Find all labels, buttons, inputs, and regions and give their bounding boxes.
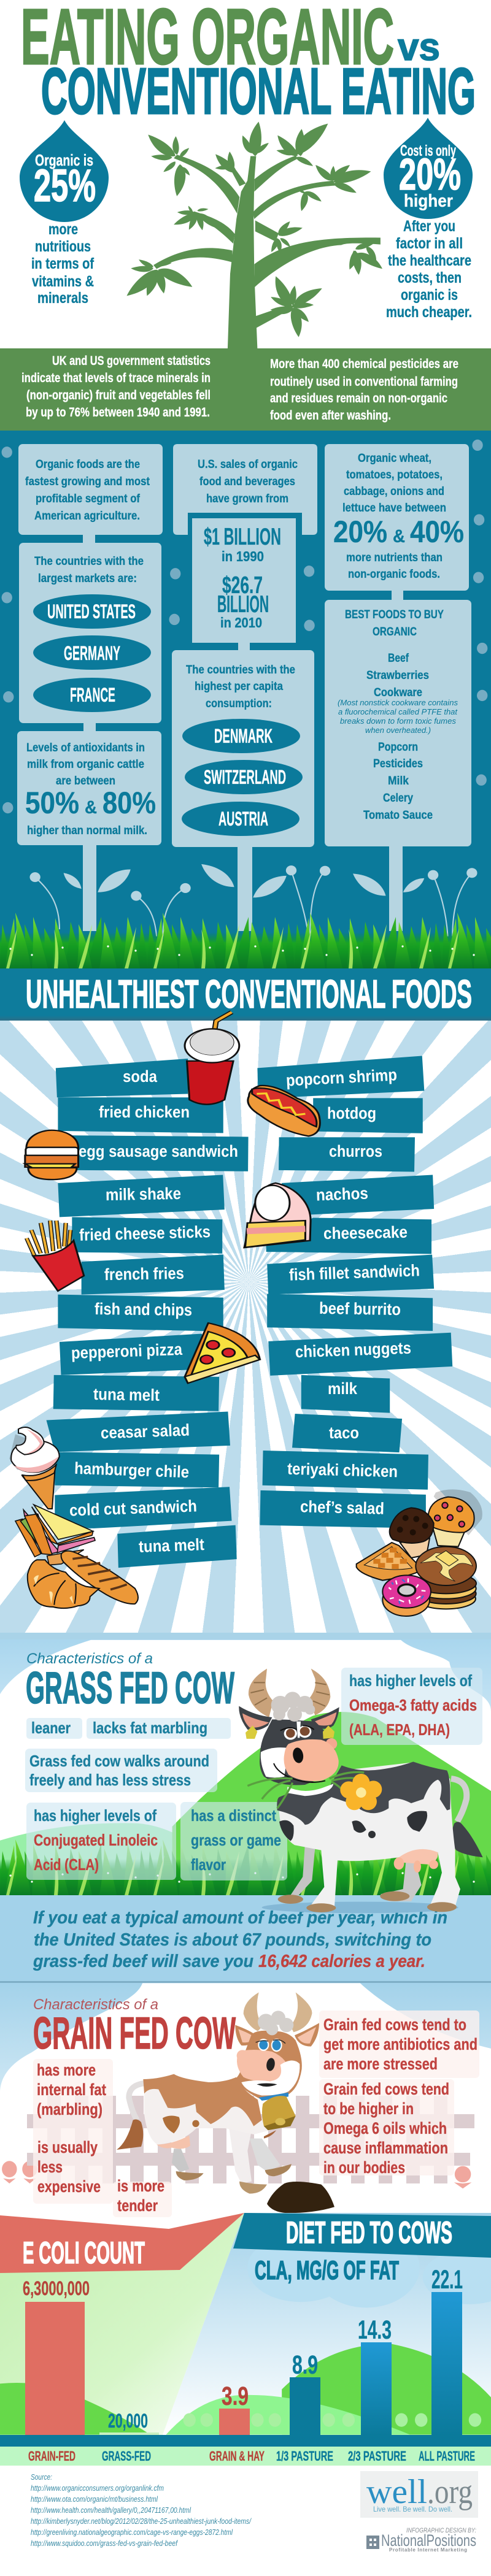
panel: grass fed cow: Conjugated Linoleic <box>34 1831 158 1849</box>
panel: largest markets: The countries with the <box>34 555 144 568</box>
callout: organic is 25% <box>20 120 109 307</box>
panel: US sales <box>173 444 317 643</box>
panel: grass fed cow: has a distinct <box>191 1806 276 1825</box>
panel: US sales: have grown from <box>206 493 288 505</box>
food list text: milk shake <box>106 1184 181 1204</box>
logo: well.org: Live well. Be well. Do well. <box>373 2505 452 2513</box>
panel: grain fed cow: (marbling) <box>37 2100 102 2118</box>
text block: sources: http://kimberlysnyder.net/blog/2012/02/28/the-25-unhealthiest-junk-food-items/ <box>31 2517 252 2526</box>
panel: more nutrients: more nutrients than <box>346 551 443 564</box>
food list text: fried cheese sticks <box>79 1222 211 1244</box>
food list text: churros <box>329 1142 382 1160</box>
panel: grain fed cow: is more <box>117 2177 164 2195</box>
band: calories saved: the United States is about 67 pounds, switching to <box>34 1930 431 1950</box>
text boxes <box>33 2011 479 2217</box>
panel: organic facts background <box>0 431 491 968</box>
icon: croissant <box>28 1560 99 1608</box>
bar chart: CLA by diet: 3.9 <box>222 2382 249 2411</box>
panel: US sales: $26.7 <box>222 572 263 599</box>
food labels: upper boxes <box>56 1056 434 1332</box>
panel: US sales: $1 BILLION <box>204 524 281 550</box>
sign posts <box>83 535 403 931</box>
chart heading: e coli count <box>0 2213 244 2273</box>
callout: cost is only 20% higher: much cheaper. <box>386 304 472 321</box>
panel: more nutrients: & <box>393 526 405 546</box>
panel: more nutrients: tomatoes, potatoes, <box>346 469 443 481</box>
food list text: cold cut sandwich <box>69 1497 197 1520</box>
panel: best foods to buy organic: Cookware <box>374 686 422 699</box>
panel: best foods to buy organic: Milk <box>388 775 409 788</box>
panel: best foods to buy organic: when overheated.) <box>365 726 431 735</box>
panel: highest per capita: DENMARK <box>214 725 273 747</box>
bar chart: e coli count: 6,3000,000 <box>23 2277 90 2299</box>
callout: cost is only 20% higher: higher <box>404 191 453 211</box>
panel: highest per capita: SWITZERLAND <box>204 766 286 788</box>
panel: fastest growing segment: profitable segment of <box>36 493 141 505</box>
chart axis and labels: 2/3 PASTURE <box>348 2448 406 2464</box>
callout: cost is only 20% higher: the healthcare <box>388 252 471 269</box>
panel: more nutrients: cabbage, onions and <box>344 485 444 498</box>
food list text: milk <box>328 1379 358 1398</box>
icon: cake <box>244 1183 311 1248</box>
panel: grain fed cow: less <box>37 2158 63 2176</box>
panel: best foods to buy organic: a fluorochemical called PTFE that <box>338 707 458 716</box>
title: vs <box>398 26 440 69</box>
grass strip <box>0 911 491 968</box>
chart axis and labels: GRASS-FED <box>102 2448 151 2464</box>
food list text: taco <box>329 1424 359 1442</box>
chart axis and labels: 1/3 PASTURE <box>276 2448 333 2464</box>
text block: sources: http://www.organicconsumers.org/organlink.cfm <box>31 2484 164 2493</box>
panel: fastest growing segment: fastest growing and most <box>25 475 150 488</box>
panel: more nutrients: non-organic foods. <box>348 568 440 581</box>
food list text: pepperoni pizza <box>71 1340 183 1362</box>
food list text: hotdog <box>327 1104 376 1122</box>
callout: cost is only 20% higher: costs, then <box>398 269 462 286</box>
text block: sources: Source: <box>31 2473 52 2482</box>
credit: national positions: Profitable Internet Marketing <box>389 2547 467 2553</box>
callout: organic is 25%: Organic is <box>35 151 93 169</box>
food list text: french fries <box>104 1264 184 1284</box>
panel: grain fed cow: Omega 6 oils which <box>323 2119 447 2137</box>
callout: cost is only 20% higher: factor in all <box>396 235 463 252</box>
panel: grass fed cow: freely and has less stress <box>29 1771 191 1789</box>
band: calories saved: grass-fed beef will save you <box>33 1952 253 1971</box>
text block: sources: http://greenliving.nationalgeographic.com/cage-vs-range-eggs-2872.html <box>31 2528 233 2537</box>
panel: grain fed cow <box>0 1983 491 2226</box>
bar chart: CLA by diet: 8.9 <box>292 2350 318 2380</box>
panel: grain fed cow: are more stressed <box>323 2055 438 2073</box>
food labels: lower boxes <box>47 1333 452 1568</box>
panel: best foods to buy organic: BEST FOODS TO BUY <box>345 608 444 621</box>
icon: tree <box>123 118 385 348</box>
panel: more nutrients: 20% <box>333 515 387 549</box>
panel: grass fed cow <box>0 1639 491 1896</box>
credit: national positions <box>366 2527 476 2553</box>
band: calories saved: If you eat a typical amount of beef per year, which in <box>33 1908 447 1928</box>
panel: largest markets <box>19 543 161 723</box>
background dots <box>2 440 487 813</box>
panel: grass fed cow: has higher levels of <box>34 1806 157 1825</box>
callout: organic is 25%: more <box>48 221 78 238</box>
panel: more nutrients: Organic wheat, <box>358 452 431 465</box>
panel: grass fed cow: (ALA, EPA, DHA) <box>349 1720 450 1739</box>
food list text: teriyaki chicken <box>287 1460 398 1481</box>
icon: sandwich <box>15 1505 95 1565</box>
band: statistics: and residues remain on non-organic <box>270 391 447 405</box>
panel: best foods to buy organic: Popcorn <box>378 741 418 754</box>
chart axis and labels: GRAIN & HAY <box>209 2448 265 2464</box>
callout: cost is only 20% higher <box>384 118 473 321</box>
chart subtitle: CLA, MG/G OF FAT <box>255 2256 399 2285</box>
band: statistics: food even after washing. <box>270 408 391 423</box>
panel: highest per capita: consumption: <box>206 697 272 710</box>
food list text: fish fillet sandwich <box>288 1261 420 1284</box>
panel: grain fed cow: Grain fed cows tend <box>323 2080 449 2098</box>
panel: antioxidants in milk: higher than normal milk. <box>27 824 147 837</box>
panel: US sales: in 2010 <box>220 615 262 631</box>
panel: grain fed cow: internal fat <box>37 2080 106 2099</box>
callout: cost is only 20% higher: 20% <box>399 150 461 199</box>
bar chart: e coli count: 20,000 <box>108 2410 148 2432</box>
panel: largest markets: UNITED STATES <box>47 600 136 623</box>
panel: antioxidants in milk: Levels of antioxidants in <box>26 742 145 754</box>
text block: sources: http://www.squidoo.com/grass-fed-vs-grain-fed-beef <box>31 2539 178 2548</box>
panel: grass fed cow: flavor <box>191 1855 226 1874</box>
food list text: tuna melt <box>138 1535 204 1556</box>
heading: grass fed cow: Characteristics of a <box>26 1650 153 1667</box>
panel: fastest growing segment <box>18 444 163 535</box>
panel: US sales: in 1990 <box>222 548 264 564</box>
panel: highest per capita: The countries with the <box>186 664 295 677</box>
panel: grass fed cow: grass or game <box>191 1831 281 1849</box>
heading: grain fed cow: GRAIN FED COW <box>33 2009 236 2058</box>
icon: baguette <box>61 1551 138 1604</box>
food list text: soda <box>123 1067 158 1086</box>
bar chart: e coli count <box>23 2277 159 2435</box>
panel: best foods to buy organic: (Most nonstick cookware contains <box>338 698 458 707</box>
panel: largest markets: FRANCE <box>70 684 115 706</box>
text boxes <box>25 1668 482 1880</box>
logo: well.org: well <box>366 2473 427 2511</box>
band: calories saved <box>0 1895 491 1983</box>
chart axis and labels <box>0 2435 491 2466</box>
panel: fastest growing segment: American agriculture. <box>34 510 140 523</box>
food list text: nachos <box>315 1184 368 1204</box>
panel: antioxidants in milk: 50% <box>25 786 79 820</box>
food list text: egg sausage sandwich <box>79 1142 238 1160</box>
food list text: chicken nuggets <box>295 1339 411 1361</box>
callout: cost is only 20% higher: Cost is only <box>400 142 456 159</box>
text block: sources: http://www.ota.com/organic/mt/business.html <box>31 2495 158 2504</box>
icon: muffins, waffle, pancakes and donut <box>357 1489 482 1616</box>
icon: soda <box>185 1012 239 1105</box>
panel: highest per capita <box>172 650 314 847</box>
bar chart: CLA by diet: 22.1 <box>431 2265 463 2294</box>
panel: fastest growing segment: Organic foods are the <box>36 458 140 471</box>
panel: US sales: food and beverages <box>199 475 295 488</box>
callout: organic is 25%: nutritious <box>35 238 91 255</box>
callout: cost is only 20% higher: organic is <box>401 286 458 304</box>
band: statistics <box>0 348 491 431</box>
illustration: grain fed cow <box>117 1992 319 2194</box>
panel: best foods to buy organic: breaks down to form toxic fumes <box>340 716 456 726</box>
strip under rays <box>0 1633 491 1639</box>
panel: best foods to buy organic: Strawberries <box>366 669 429 682</box>
heading: grass fed cow <box>26 1650 234 1713</box>
leaves and sprouts <box>29 864 477 937</box>
band: calories saved: 16,642 calories a year. <box>258 1952 425 1971</box>
panel: best foods to buy organic: Pesticides <box>373 757 423 770</box>
panel: grain fed cow: to be higher in <box>323 2099 414 2118</box>
food list text: fish and chips <box>95 1300 192 1319</box>
panel: grain fed cow: cause inflammation <box>323 2139 448 2157</box>
logo: well.org: .org <box>427 2473 473 2511</box>
icon: hotdog <box>248 1086 320 1136</box>
panel: best foods to buy organic: Beef <box>388 652 409 665</box>
food list text <box>69 1065 420 1556</box>
panel: grass fed cow: lacks fat marbling <box>93 1719 207 1737</box>
food list text: fried chicken <box>99 1103 190 1121</box>
chart heading: diet fed to cows <box>233 2213 491 2258</box>
band: statistics: by up to 76% between 1940 and 1991. <box>26 405 210 420</box>
panel: grain fed cow: expensive <box>37 2177 101 2196</box>
heading: grass fed cow: GRASS FED COW <box>26 1663 234 1713</box>
icon: ice cream <box>9 1427 60 1509</box>
title <box>21 0 476 128</box>
food list text: beef burrito <box>319 1299 401 1319</box>
panel: best foods to buy organic: Tomato Sauce <box>363 809 433 822</box>
panel: highest per capita: AUSTRIA <box>218 808 268 830</box>
panel: antioxidants in milk: milk from organic cattle <box>27 758 144 771</box>
icon: manure pile <box>267 2182 334 2213</box>
band: statistics: UK and US government statistics <box>52 354 211 368</box>
panel: charts background <box>0 2213 491 2435</box>
panel: grain fed cow: in our bodies <box>323 2158 405 2177</box>
panel: grain fed cow: is usually <box>37 2138 98 2156</box>
panel: grain fed cow: tender <box>117 2196 158 2215</box>
panel: US sales: U.S. sales of organic <box>198 458 298 471</box>
chart axis and labels: GRAIN-FED <box>28 2448 75 2464</box>
icon: burger <box>25 1130 79 1179</box>
callout: cost is only 20% higher: After you <box>403 218 455 235</box>
food list text: hamburger chile <box>74 1459 190 1481</box>
heading: grain fed cow <box>33 1996 236 2058</box>
bar chart: CLA by diet <box>219 2265 463 2435</box>
panel: US sales: BILLION <box>217 591 269 618</box>
illustration: grass fed cow <box>239 1669 483 1913</box>
panel: best foods to buy organic <box>325 600 471 846</box>
panel: more nutrients <box>325 444 469 591</box>
panel: antioxidants in milk: & <box>85 797 97 818</box>
panel: largest markets: GERMANY <box>64 642 120 664</box>
callout: organic is 25%: in terms of <box>31 255 95 272</box>
panel: more nutrients: lettuce have between <box>342 502 446 515</box>
bar chart: CLA by diet: 14.3 <box>358 2315 392 2345</box>
callout: organic is 25%: 25% <box>34 160 96 211</box>
panel: grain fed cow: has more <box>37 2061 96 2079</box>
text block: sources: http://www.health.com/health/gallery/0,,20471167,00.html <box>31 2506 191 2515</box>
food list text: popcorn shrimp <box>285 1065 398 1090</box>
food list text: ceasar salad <box>100 1420 190 1443</box>
icon: fries <box>26 1221 84 1291</box>
panel: grass fed cow: leaner <box>31 1719 71 1737</box>
band: statistics: (non-organic) fruit and vegetables fell <box>26 388 211 402</box>
callout: organic is 25%: minerals <box>37 289 88 307</box>
food list text: chef’s salad <box>300 1497 384 1518</box>
food list text: tuna melt <box>93 1385 160 1405</box>
callout: organic is 25%: vitamins & <box>32 273 94 290</box>
food icons: upper <box>25 1012 320 1291</box>
panel: antioxidants in milk <box>17 731 161 845</box>
panel: best foods to buy organic: ORGANIC <box>373 626 417 638</box>
panel: more nutrients: 40% <box>410 515 464 549</box>
icon: pizza <box>185 1323 260 1383</box>
band: statistics: indicate that levels of trace minerals in <box>21 371 211 385</box>
logo: well.org <box>360 2471 478 2518</box>
panel: antioxidants in milk: are between <box>56 775 115 788</box>
panel: highest per capita: highest per capita <box>195 680 283 693</box>
food list text: cheesecake <box>323 1223 408 1243</box>
panel: antioxidants in milk: 80% <box>102 786 156 820</box>
panel: grass fed cow: Grass fed cow walks around <box>29 1752 209 1770</box>
fence <box>27 2096 474 2183</box>
panel: grass fed cow: Acid (CLA) <box>34 1855 99 1874</box>
panel: largest markets: largest markets are: <box>38 572 137 585</box>
text block: sources <box>31 2473 252 2548</box>
panel: best foods to buy organic: Celery <box>383 792 413 805</box>
credit: national positions: INFOGRAPHIC DESIGN BY: <box>406 2527 476 2534</box>
chart heading: e coli count: E COLI COUNT <box>23 2236 145 2270</box>
heading: grain fed cow: Characteristics of a <box>33 1996 158 2013</box>
